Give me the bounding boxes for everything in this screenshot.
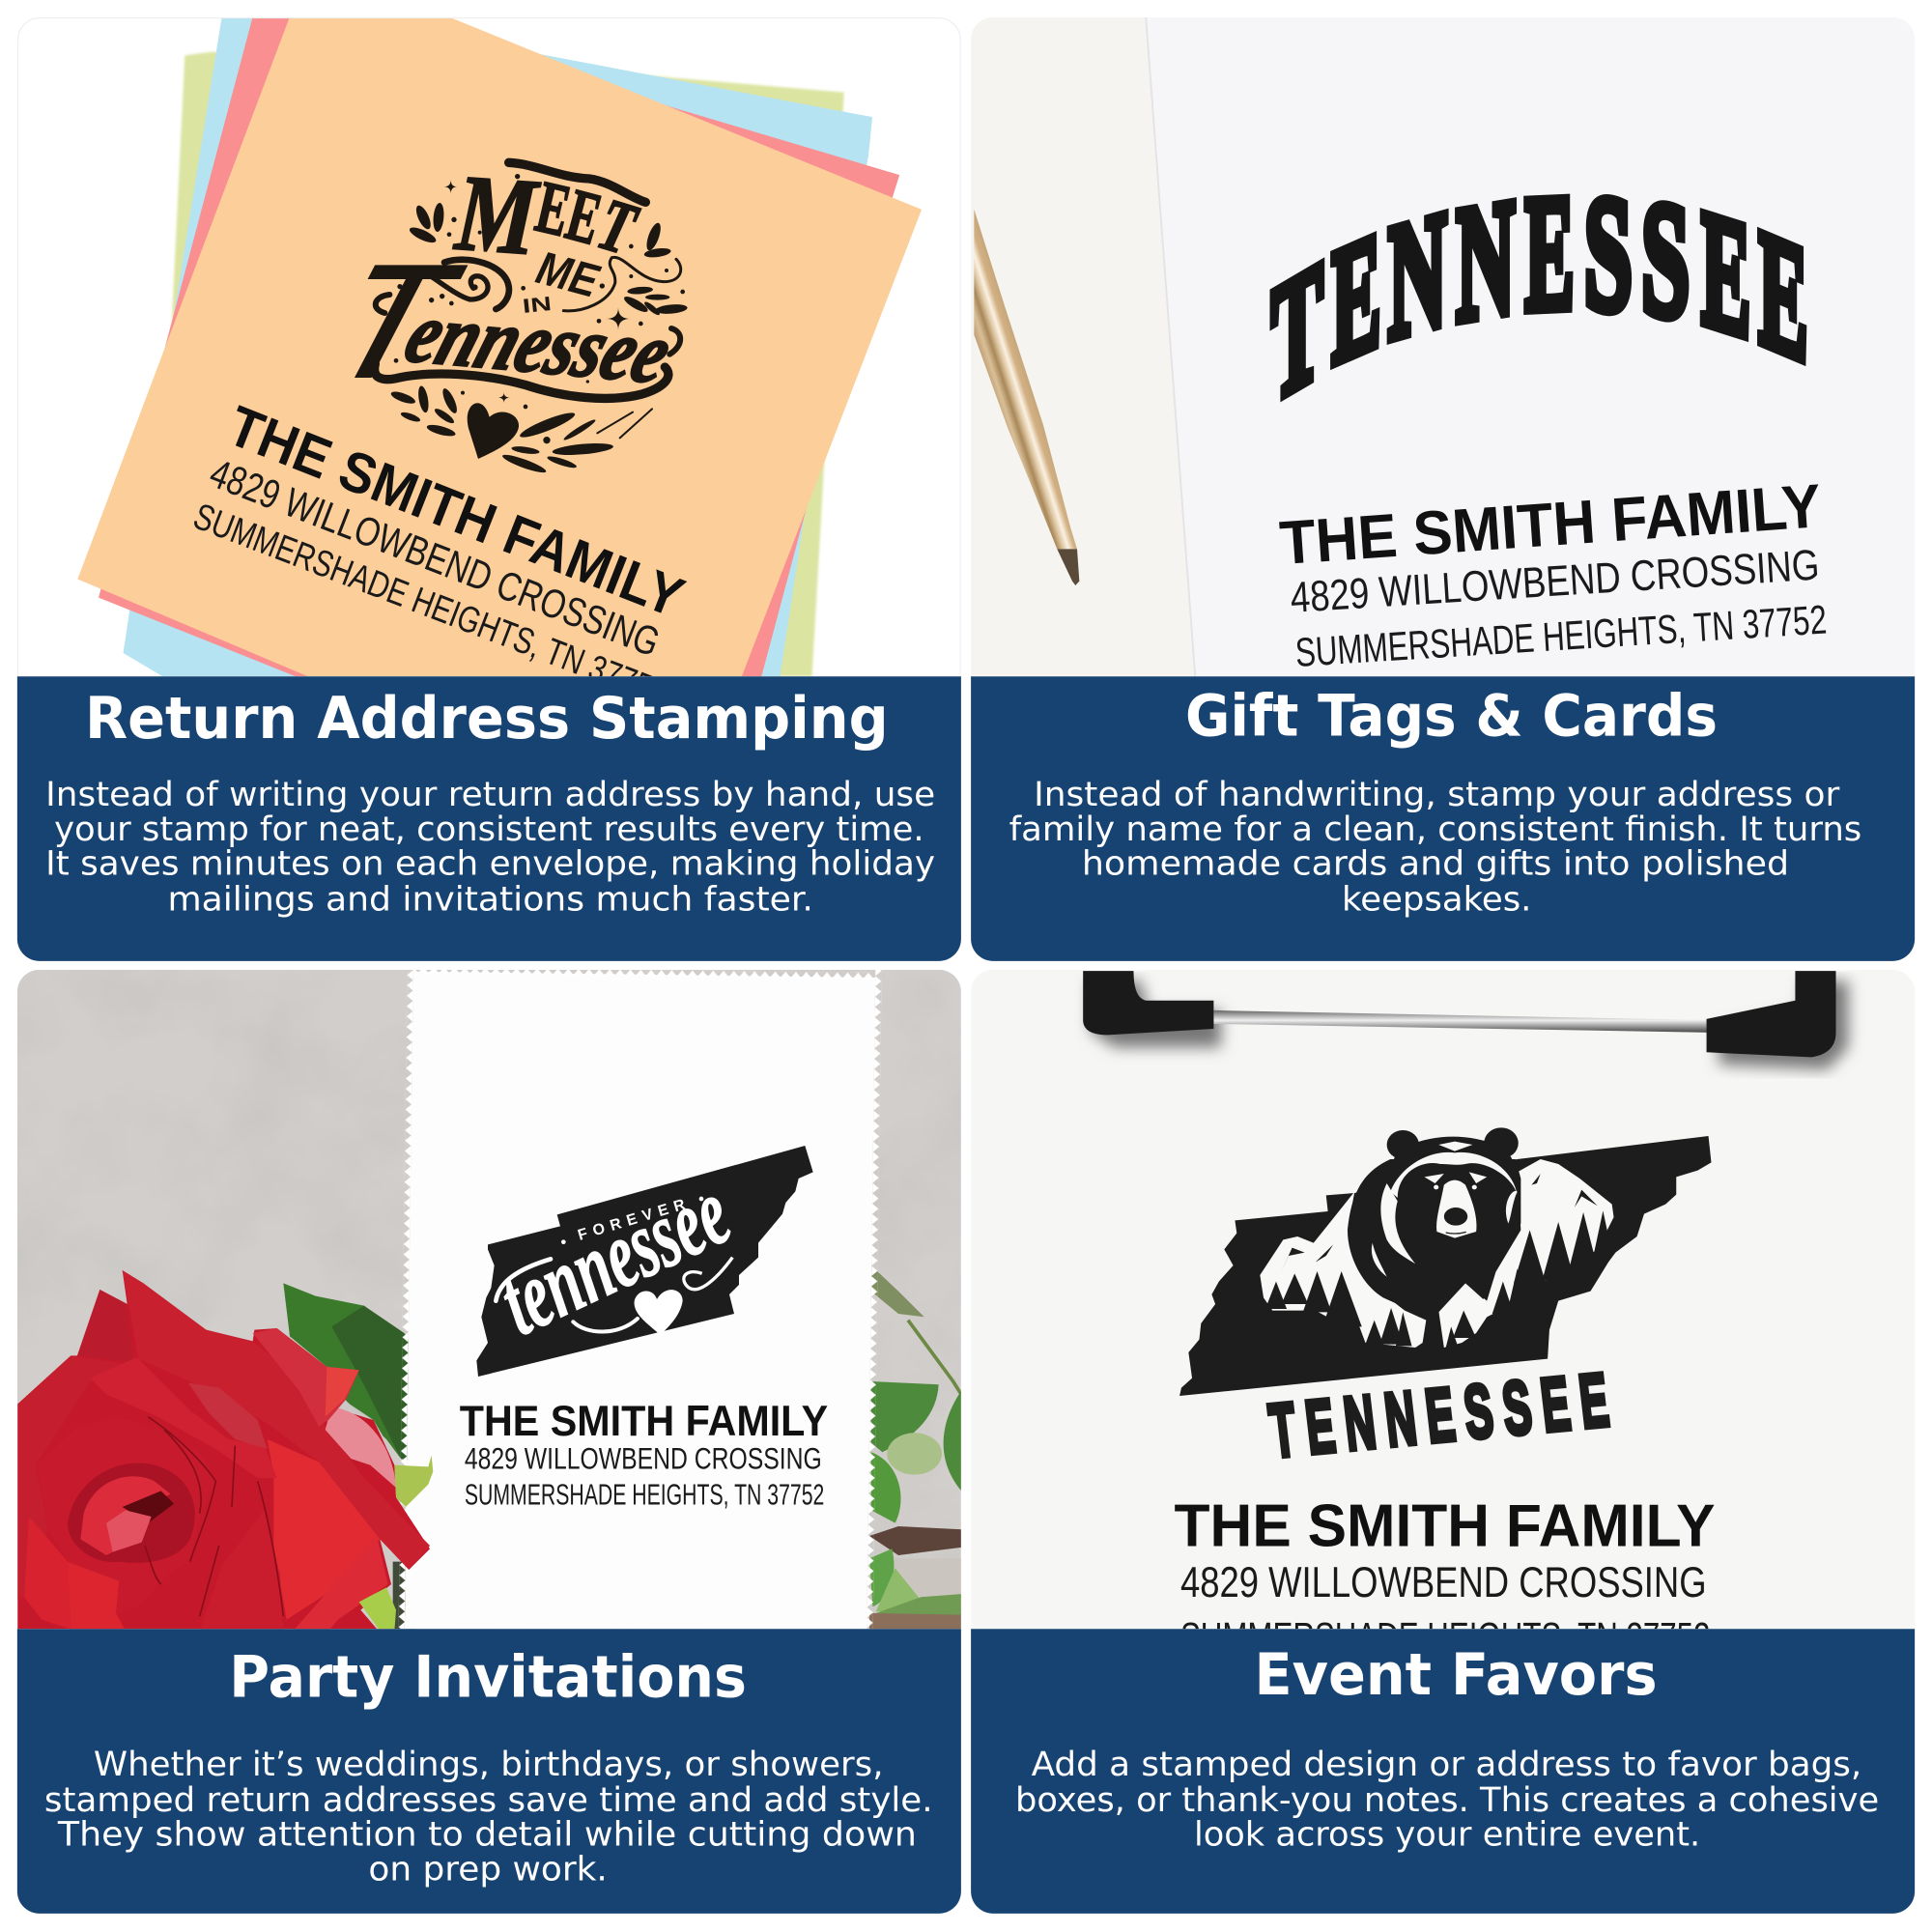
stamp address text: THE SMITH FAMILY bbox=[1175, 1492, 1716, 1560]
caption background bbox=[971, 676, 1915, 961]
stamp logo: arched TENNESSEE: S bbox=[1584, 161, 1633, 347]
photo: paper with pen: 4829 WILLOWBEND CROSSING bbox=[1289, 542, 1821, 622]
photo: paper with pen bbox=[971, 17, 1915, 676]
sepals over card bbox=[359, 1456, 433, 1631]
photo: invitation with red rose: 4829 WILLOWBEND CROSSING bbox=[465, 1440, 822, 1475]
body text: Instead of handwriting, stamp your address or bbox=[1034, 776, 1840, 814]
panel: gift tags and cards bbox=[971, 17, 1915, 961]
stamp logo: arched TENNESSEE: N bbox=[1388, 178, 1447, 375]
word: Meet bbox=[452, 177, 642, 255]
stamp logo: forever tennessee state silhouette: tennessee bbox=[484, 1157, 745, 1355]
stamp logo: arched TENNESSEE: E bbox=[1331, 196, 1380, 399]
word: Tennessee: T bbox=[311, 232, 478, 412]
caption background bbox=[971, 1629, 1915, 1914]
body text bbox=[1015, 1746, 1879, 1855]
panel: return address stamping bbox=[17, 17, 961, 961]
body text bbox=[45, 776, 935, 920]
body text: family name for a clean, consistent finish. It turns bbox=[1009, 810, 1861, 849]
stamp logo: arched TENNESSEE: E bbox=[1701, 176, 1750, 373]
body text: Add a stamped design or address to favor bags, bbox=[1032, 1746, 1861, 1784]
body text: They show attention to detail while cutting down bbox=[57, 1816, 917, 1855]
stamp logo caption: TENNESSEE: TENNESSEE bbox=[1265, 1358, 1612, 1474]
body text: Whether it’s weddings, birthdays, or showers, bbox=[94, 1746, 884, 1784]
photo: stacked colored papers with stamp: SUMMERSHADE HEIGHTS, TN 37752 bbox=[187, 496, 672, 715]
body text: homemade cards and gifts into polished bbox=[1082, 845, 1789, 884]
word: Meet: E bbox=[529, 165, 578, 252]
heading: Return Address Stamping bbox=[85, 685, 889, 753]
stamp logo: meet me in Tennessee bbox=[311, 153, 688, 475]
word: Tennessee bbox=[355, 265, 668, 384]
body text bbox=[1009, 776, 1861, 920]
word: Meet: E bbox=[558, 173, 610, 260]
invitation card with pinked edges bbox=[398, 958, 882, 1671]
stamp logo: arched TENNESSEE: E bbox=[1525, 161, 1575, 345]
word: in: IN bbox=[522, 293, 553, 318]
heading: Event Favors bbox=[1254, 1641, 1658, 1709]
photo: invitation with red rose bbox=[17, 958, 963, 1671]
word: Meet: M bbox=[450, 153, 544, 278]
body text: mailings and invitations much faster. bbox=[167, 881, 813, 920]
panel: party invitations bbox=[17, 958, 963, 1914]
icon: gold pen bbox=[974, 210, 1079, 585]
body text: It saves minutes on each envelope, making holiday bbox=[45, 845, 935, 884]
stamp logo: arched TENNESSEE bbox=[1269, 193, 1806, 402]
greenery right bbox=[869, 1265, 963, 1633]
stamp logo: forever tennessee state silhouette bbox=[476, 1146, 813, 1377]
stamp logo: arched TENNESSEE: T bbox=[1271, 225, 1323, 438]
leaf behind card bbox=[283, 1283, 415, 1630]
body text bbox=[44, 1746, 933, 1889]
stamp logo: forever tennessee state silhouette: FOREVER bbox=[576, 1197, 688, 1244]
body text: Instead of writing your return address by hand, use bbox=[45, 776, 935, 814]
photo: clipboard with stamp bbox=[971, 970, 1915, 1659]
stamp logo: bear in state silhouette bbox=[1179, 1127, 1712, 1474]
word: Tennessee: ennessee bbox=[394, 285, 683, 401]
stamp logo: arched TENNESSEE: E bbox=[1758, 194, 1807, 397]
caption background bbox=[17, 676, 961, 961]
stamp logo: arched TENNESSEE: S bbox=[1641, 167, 1690, 355]
stamp address text: THE SMITH FAMILY bbox=[460, 1398, 828, 1445]
body text: stamped return addresses save time and add style. bbox=[44, 1781, 933, 1820]
icon: red rose bbox=[17, 1270, 430, 1633]
heading: Gift Tags & Cards bbox=[1185, 682, 1718, 750]
photo: clipboard with stamp: 4829 WILLOWBEND CROSSING bbox=[1180, 1559, 1707, 1606]
stamp address text: THE SMITH FAMILY bbox=[219, 394, 692, 630]
body text: look across your entire event. bbox=[1194, 1816, 1700, 1855]
photo: stacked colored papers with stamp bbox=[17, 17, 961, 715]
photo: stacked colored papers with stamp: 4829 WILLOWBEND CROSSING bbox=[204, 450, 666, 666]
stamp logo: arched TENNESSEE: N bbox=[1456, 165, 1515, 357]
caption background bbox=[17, 1629, 961, 1914]
body text: on prep work. bbox=[368, 1850, 608, 1889]
body text: your stamp for neat, consistent results every time. bbox=[54, 810, 924, 849]
body text: boxes, or thank-you notes. This creates a cohesive bbox=[1015, 1781, 1879, 1820]
photo: clipboard with stamp: SUMMERSHADE HEIGHTS, TN 37752 bbox=[1180, 1614, 1710, 1659]
body text: keepsakes. bbox=[1342, 881, 1531, 920]
heading: Party Invitations bbox=[229, 1643, 747, 1711]
stamp address text: THE SMITH FAMILY bbox=[1277, 470, 1823, 578]
word: Me: ME bbox=[531, 242, 605, 308]
panel: event favors bbox=[971, 970, 1915, 1914]
word: Meet: T bbox=[589, 183, 646, 271]
icon: clipboard clip bbox=[1083, 971, 1848, 1069]
photo: invitation with red rose: SUMMERSHADE HEIGHTS, TN 37752 bbox=[465, 1478, 824, 1511]
